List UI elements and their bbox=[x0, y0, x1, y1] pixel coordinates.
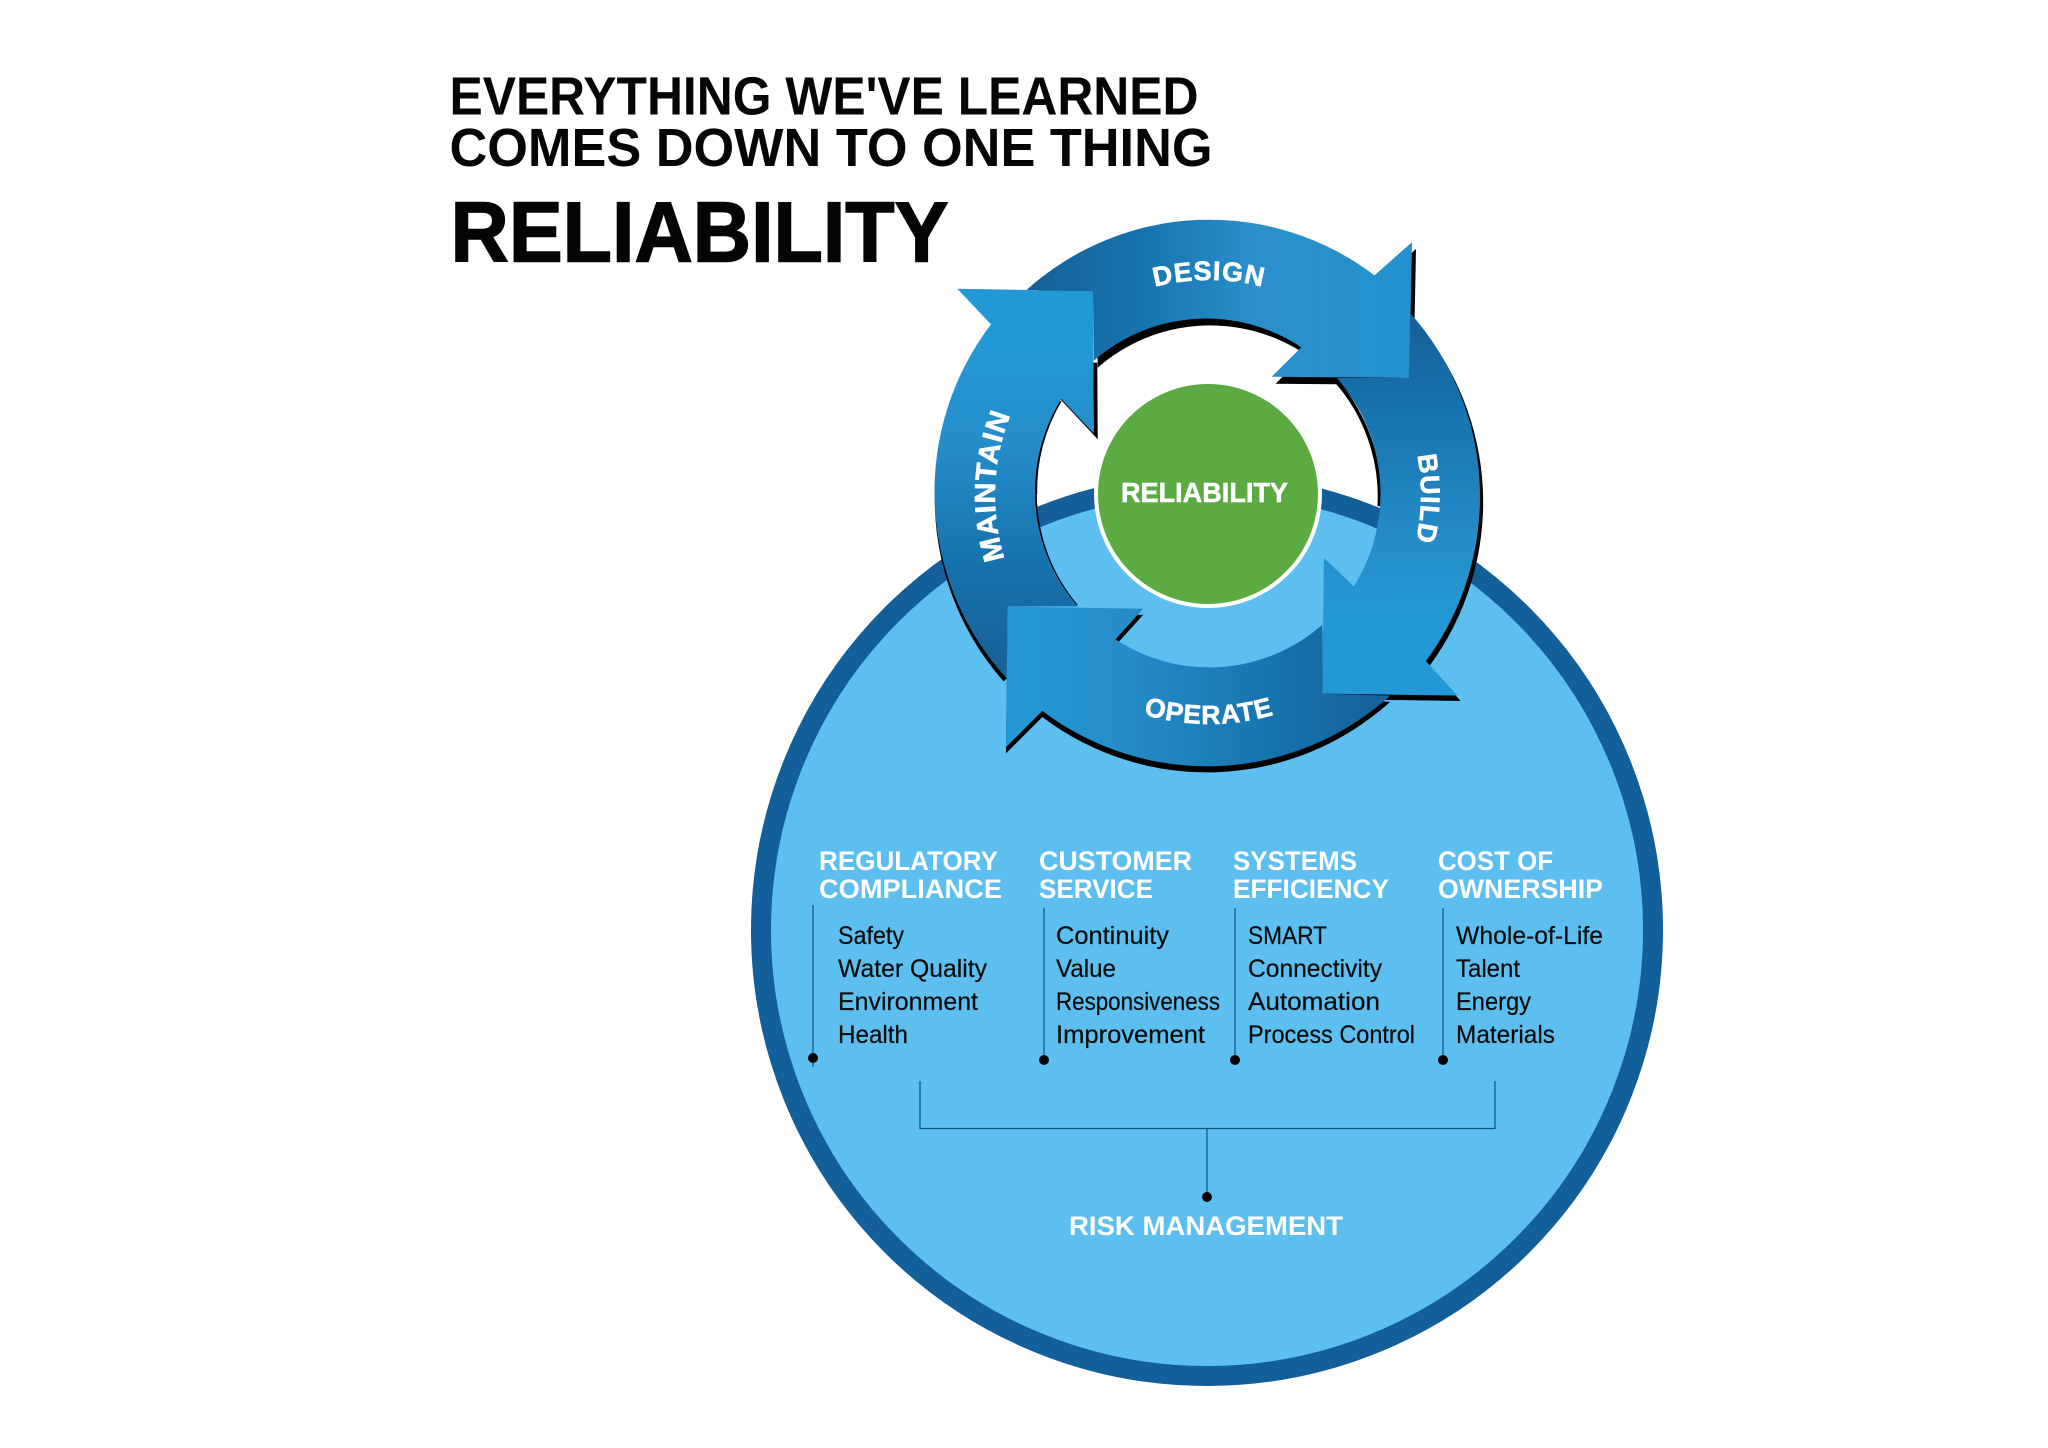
title: RELIABILITY bbox=[450, 186, 948, 280]
heading: SYSTEMS bbox=[1233, 846, 1357, 876]
heading: COST OF bbox=[1438, 846, 1553, 876]
items: Environment bbox=[838, 988, 978, 1016]
items: Safety bbox=[838, 922, 904, 950]
items: Automation bbox=[1248, 988, 1380, 1016]
items bbox=[1248, 922, 1415, 1049]
heading bbox=[1233, 846, 1389, 904]
label: operate: OPERATE bbox=[1146, 697, 1273, 724]
arrow: operate bbox=[1006, 606, 1390, 766]
arrow shadows bbox=[935, 227, 1483, 772]
label: maintain: MAINTAIN bbox=[974, 410, 1010, 562]
connector with dot bbox=[1230, 908, 1240, 1065]
label: design: DESIGN bbox=[1152, 261, 1265, 287]
center reliability circle: RELIABILITY bbox=[1121, 477, 1288, 508]
heading: SERVICE bbox=[1039, 874, 1153, 904]
items: Materials bbox=[1456, 1021, 1555, 1049]
column: regulatory compliance bbox=[808, 846, 1002, 1067]
cycle ring bbox=[934, 220, 1484, 772]
items: Talent bbox=[1456, 955, 1520, 983]
large circle panel bbox=[761, 484, 1653, 1376]
heading bbox=[1438, 846, 1603, 904]
heading: REGULATORY bbox=[819, 846, 998, 876]
arrow: design bbox=[1027, 220, 1412, 378]
heading bbox=[1039, 846, 1192, 904]
heading: OWNERSHIP bbox=[1438, 874, 1603, 904]
items: Energy bbox=[1456, 988, 1531, 1016]
items: Connectivity bbox=[1248, 955, 1382, 983]
risk management label: RISK MANAGEMENT bbox=[1069, 1211, 1344, 1241]
items: Value bbox=[1056, 955, 1116, 983]
heading: COMPLIANCE bbox=[819, 874, 1002, 904]
items: Continuity bbox=[1056, 922, 1170, 950]
heading: CUSTOMER bbox=[1039, 846, 1192, 876]
column: customer service bbox=[1039, 846, 1220, 1065]
title: COMES DOWN TO ONE THING bbox=[450, 119, 1212, 178]
items: Water Quality bbox=[838, 955, 987, 983]
heading bbox=[819, 846, 1002, 904]
items: SMART bbox=[1248, 922, 1327, 950]
label: build: BUILD bbox=[1417, 454, 1440, 542]
column: systems efficiency bbox=[1230, 846, 1415, 1065]
column: cost of ownership bbox=[1438, 846, 1603, 1065]
connector with dot bbox=[1039, 908, 1049, 1065]
title bbox=[450, 68, 1212, 280]
items bbox=[1056, 922, 1220, 1049]
connector with dot bbox=[1438, 908, 1448, 1065]
risk bracket connector bbox=[920, 1081, 1495, 1202]
items: Improvement bbox=[1056, 1021, 1205, 1049]
connector with dot bbox=[808, 905, 818, 1067]
items: Responsiveness bbox=[1056, 988, 1220, 1016]
title: EVERYTHING WE'VE LEARNED bbox=[450, 68, 1198, 126]
items: Whole-of-Life bbox=[1456, 922, 1603, 950]
items bbox=[838, 922, 987, 1049]
arrow: maintain bbox=[934, 289, 1094, 678]
items bbox=[1456, 922, 1603, 1049]
items: Health bbox=[838, 1021, 908, 1049]
heading: EFFICIENCY bbox=[1233, 874, 1389, 904]
items: Process Control bbox=[1248, 1021, 1415, 1049]
arrow: build bbox=[1322, 313, 1480, 696]
center reliability circle bbox=[1096, 382, 1320, 606]
